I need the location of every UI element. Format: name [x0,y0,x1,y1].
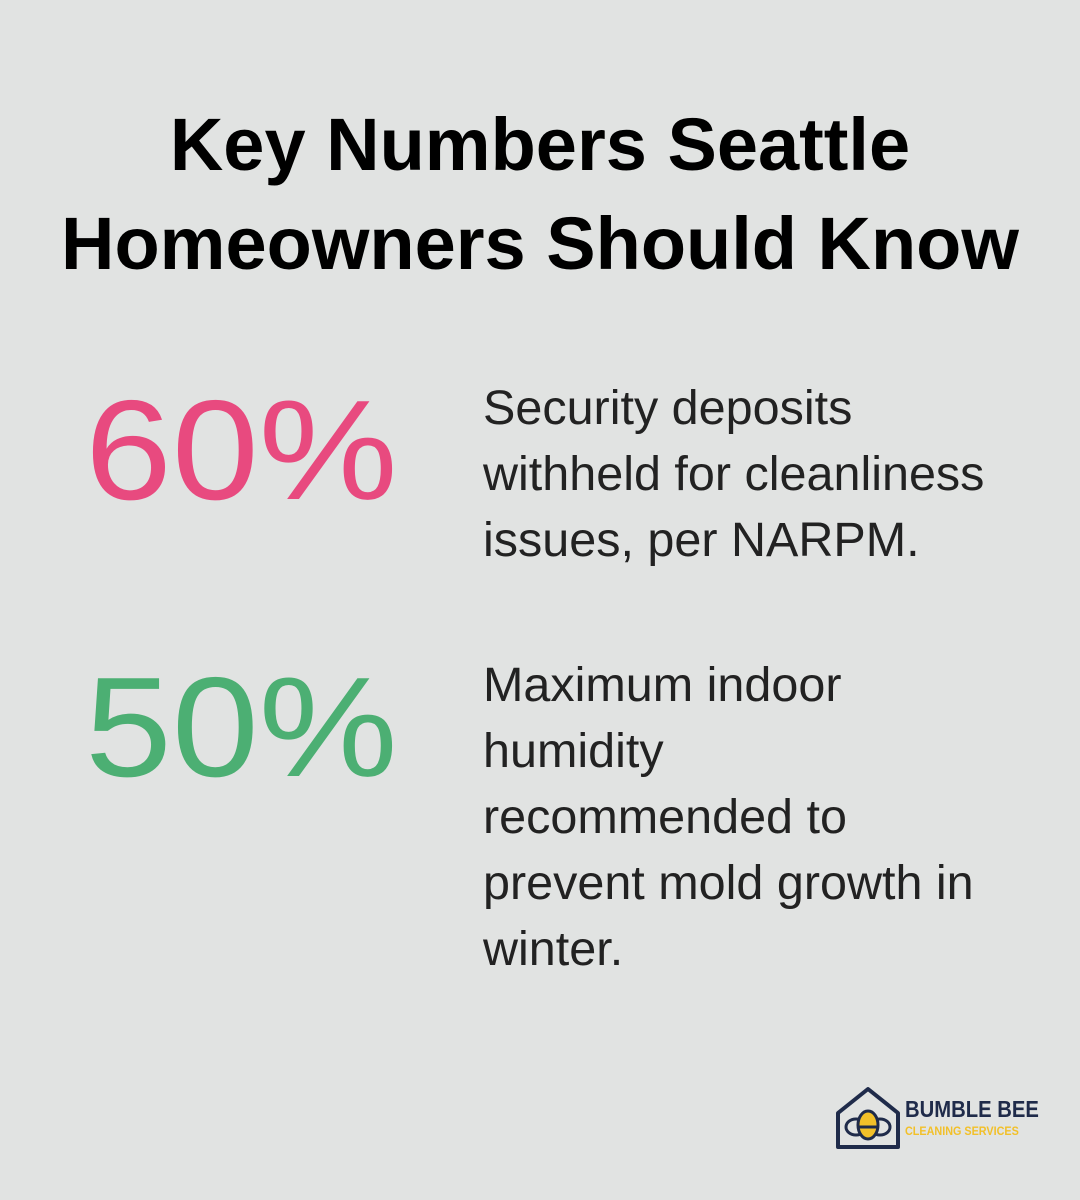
text: 60% description [483,381,984,567]
stat: 60%: 60% [85,371,398,530]
logo: Bumble Bee Cleaning Services [836,1087,1039,1149]
text: 50% description: winter. [483,922,623,976]
text: 50% description: prevent mold growth in [483,856,974,910]
text: 60% description: withheld for cleanliness [483,447,984,501]
text: 60% description: Security deposits [483,381,852,435]
logo: Bumble Bee Cleaning Services: CLEANING SERVICES [905,1124,1019,1138]
title [61,103,1020,285]
text: 60% description: issues, per NARPM. [483,513,920,567]
stat: 50%: 50% [85,648,398,807]
text: 50% description: recommended to [483,790,847,844]
logo: Bumble Bee Cleaning Services: BUMBLE BEE [905,1096,1039,1122]
title: Homeowners Should Know [61,202,1019,285]
title: Key Numbers Seattle [170,103,910,186]
text: 50% description: humidity [483,724,664,778]
text: 50% description [483,658,974,976]
text: 50% description: Maximum indoor [483,658,841,712]
icon: bee house [836,1087,900,1149]
